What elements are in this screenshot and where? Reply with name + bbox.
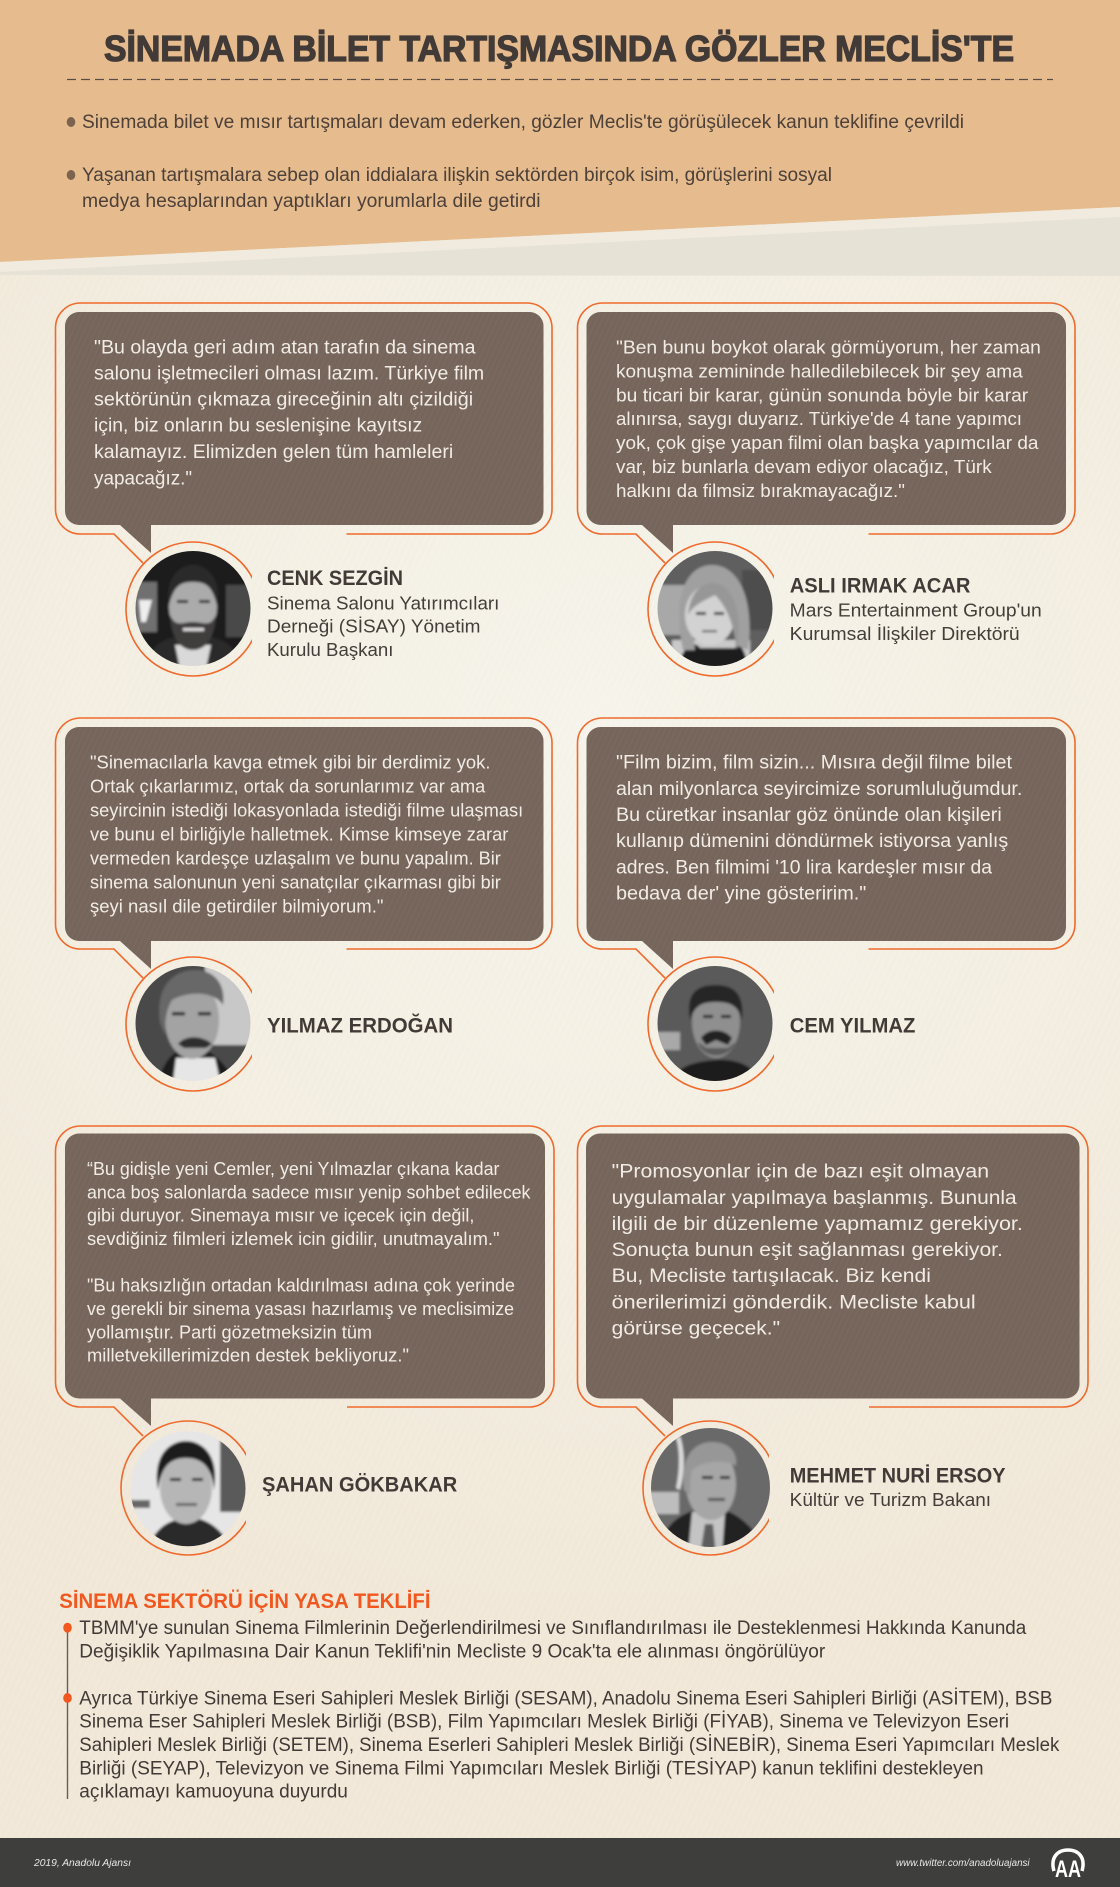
proposal text: açıklamayı kamuoyuna duyurdu	[79, 1782, 348, 1803]
bullet markers	[63, 1623, 72, 1703]
section heading: SİNEMA SEKTÖRÜ İÇİN YASA TEKLİFİ	[59, 1590, 431, 1613]
portrait ring	[648, 542, 782, 676]
quote text: seyircinin istediği lokasyonlada istediği filme ulaşması	[90, 800, 523, 821]
quote text: Sonuçta bunun eşit sağlanması gerekiyor.	[612, 1240, 1003, 1261]
photo: Şahan Gökbakar	[130, 1432, 246, 1546]
intro bullets: medya hesaplarından yaptıkları yorumlarla dile getirdi	[82, 191, 541, 212]
proposal text: Birliği (SEYAP), Televizyon ve Sinema Filmi Yapımcıları Meslek Birliği (TESİYAP) kanun teklifini destekleyen	[79, 1758, 984, 1779]
photo: Cenk Sezgin	[136, 551, 250, 666]
name: ŞAHAN GÖKBAKAR	[262, 1474, 457, 1497]
quote text: salonu işletmecileri olması lazım. Türkiye film	[94, 363, 484, 384]
quote text: “Bu gidişle yeni Cemler, yeni Yılmazlar çıkana kadar	[87, 1159, 500, 1179]
quote text: Bu cüretkar insanlar göz önünde olan kişileri	[616, 805, 1002, 826]
credit: 2019, Anadolu Ajansı	[33, 1858, 131, 1869]
intro bullets	[67, 112, 964, 212]
quote text: Bu, Mecliste tartışılacak. Biz kendi	[612, 1266, 931, 1287]
quote text: şeyi nasıl dile getirdiler bilmiyorum."	[90, 896, 383, 917]
quote text: milletvekillerimizden destek bekliyoruz."	[87, 1346, 409, 1366]
portrait ring	[648, 957, 782, 1091]
quote text	[87, 1159, 531, 1366]
role: Kurumsal İlişkiler Direktörü	[790, 623, 1020, 644]
header band	[0, 0, 1120, 276]
quote text: bu ticari bir karar, günün sonunda böyle bir karar	[616, 386, 1028, 406]
role: Derneği (SİSAY) Yönetim	[267, 616, 480, 637]
panel: Yılmaz Erdoğan	[56, 718, 552, 1091]
quote text: yok, çok gişe yapan filmi olan başka yapımcılar da	[616, 433, 1040, 453]
quote text: sinema salonunun yeni sanatçılar çıkarması gibi bir	[90, 872, 501, 893]
panel: Şahan Gökbakar	[56, 1126, 554, 1555]
role: Mars Entertainment Group'un	[790, 600, 1042, 621]
quote text: görürse geçecek."	[612, 1318, 780, 1339]
icon: Anadolu Agency logo: AA	[1055, 1856, 1081, 1883]
portrait ring	[121, 1421, 255, 1555]
quote text: ve gerekli bir sinema yasası hazırlamış ve meclisimize	[87, 1299, 514, 1319]
quote text: halkını da filmsiz bırakmayacağız."	[616, 481, 905, 501]
role: Kültür ve Turizm Bakanı	[790, 1489, 991, 1510]
quote text: önerilerimizi gönderdik. Mecliste kabul	[612, 1292, 976, 1313]
role: Sinema Salonu Yatırımcıları	[267, 592, 499, 613]
proposal text	[79, 1618, 1060, 1803]
quote text: için, biz onların bu seslenişine kayıtsız	[94, 416, 422, 437]
quote text	[612, 1162, 1023, 1339]
quote text: yapacağız."	[94, 468, 192, 489]
name: MEHMET NURİ ERSOY	[790, 1464, 1006, 1487]
quote text: "Film bizim, film sizin... Mısıra değil filme bilet	[616, 752, 1013, 773]
quote text: adres. Ben filmimi '10 lira kardeşler mısır da	[616, 857, 992, 878]
quote text: "Bu olayda geri adım atan tarafın da sinema	[94, 337, 476, 358]
quote text: alınırsa, saygı duyarız. Türkiye'de 4 tane yapımcı	[616, 409, 1022, 429]
quote text	[616, 752, 1022, 904]
proposal text: Değişiklik Yapılmasına Dair Kanun Teklifi'nin Mecliste 9 Ocak'ta ele alınması öngörülüyor	[79, 1642, 826, 1663]
quote text: ve bunu el birliğiyle halletmek. Kimse kimseye zarar	[90, 824, 508, 845]
quote text: kalamayız. Elimizden gelen tüm hamleleri	[94, 442, 453, 463]
quote text: "Ben bunu boykot olarak görmüyorum, her zaman	[616, 338, 1041, 358]
icon: Anadolu Agency logo	[1053, 1850, 1083, 1883]
name: CENK SEZGİN	[267, 567, 403, 590]
panel: Aslı Irmak Acar	[578, 303, 1075, 676]
role	[790, 600, 1042, 644]
quote text: alan milyonlarca seyircimize sorumluluğumdur.	[616, 779, 1022, 800]
quote text: sektörünün çıkmaza gireceğinin altı çizildiği	[94, 390, 473, 411]
portrait ring	[643, 1421, 777, 1555]
proposal text: Sinema Eser Sahipleri Meslek Birliği (BSB), Film Yapımcıları Meslek Birliği (FİYAB), Sinema ve Televizyon Eseri	[79, 1712, 1009, 1733]
quote text: "Sinemacılarla kavga etmek gibi bir derdimiz yok.	[90, 751, 490, 772]
title: SİNEMADA BİLET TARTIŞMASINDA GÖZLER MECLİS'TE	[104, 28, 1014, 69]
intro bullets: Yaşanan tartışmalara sebep olan iddialara ilişkin sektörden birçok isim, görüşlerini sosyal	[82, 165, 832, 186]
name: YILMAZ ERDOĞAN	[267, 1013, 453, 1037]
twitter address: www.twitter.com/anadoluajansi	[896, 1858, 1030, 1869]
quote text	[94, 337, 484, 489]
quote text: "Promosyonlar için de bazı eşit olmayan	[612, 1162, 989, 1183]
quote text: ilgili de bir düzenleme yapmamız gerekiyor.	[612, 1214, 1023, 1235]
photo: Aslı Irmak Acar	[658, 551, 772, 666]
intro bullets: Sinemada bilet ve mısır tartışmaları devam ederken, gözler Meclis'te görüşülecek kanun teklifine çevrildi	[82, 112, 964, 133]
photo: Cem Yılmaz	[658, 966, 772, 1081]
quote text: "Bu haksızlığın ortadan kaldırılması adına çok yerinde	[87, 1276, 515, 1296]
panel: Cenk Sezgin	[56, 303, 552, 676]
panel: Cem Yılmaz	[578, 718, 1075, 1091]
name: ASLI IRMAK ACAR	[790, 575, 970, 598]
quote text: kullanıp dümenini döndürmek istiyorsa yanlış	[616, 831, 1008, 852]
quote text: bedava der' yine gösteririm."	[616, 883, 866, 904]
proposal text: Ayrıca Türkiye Sinema Eseri Sahipleri Meslek Birliği (SESAM), Anadolu Sinema Eseri Sahipleri Birliği (ASİTEM), BSB	[79, 1688, 1052, 1709]
proposal text: TBMM'ye sunulan Sinema Filmlerinin Değerlendirilmesi ve Sınıflandırılması ile Desteklenmesi Hakkında Kanunda	[79, 1618, 1027, 1639]
name: CEM YILMAZ	[790, 1014, 916, 1037]
role	[267, 592, 499, 660]
role: Kurulu Başkanı	[267, 639, 393, 660]
quote text: yollamıştır. Parti gözetmeksizin tüm	[87, 1322, 372, 1342]
footer	[0, 1838, 1120, 1887]
photo: Yılmaz Erdoğan	[136, 966, 250, 1081]
quote text: vermeden kardeşçe uzlaşalım ve bunu yapalım. Bir	[90, 848, 501, 869]
quote text: sevdiğiniz filmleri izlemek icin gidilir, unutmayalım."	[87, 1229, 500, 1249]
section: law proposal	[59, 1590, 1060, 1803]
portrait ring	[126, 542, 260, 676]
quote text: Ortak çıkarlarımız, ortak da sorunlarımız var ama	[90, 775, 486, 796]
quote text: konuşma zemininde halledilebilecek bir şey ama	[616, 362, 1024, 382]
quote text	[616, 338, 1041, 501]
quote text: anca boş salonlarda sadece mısır yenip sohbet edilecek	[87, 1182, 531, 1202]
photo: Mehmet Nuri Ersoy	[651, 1428, 770, 1547]
panel: Mehmet Nuri Ersoy	[578, 1126, 1088, 1555]
proposal text: Sahipleri Meslek Birliği (SETEM), Sinema Eserleri Sahipleri Meslek Birliği (SİNEBİR), Sinema Eseri Yapımcıları Meslek	[79, 1735, 1060, 1756]
quote text: uygulamalar yapılmaya başlanmış. Bununla	[612, 1188, 1017, 1209]
portrait ring	[126, 957, 260, 1091]
quote text	[90, 751, 523, 917]
quote text: var, biz bunlarla devam ediyor olacağız, Türk	[616, 457, 993, 477]
quote text: gibi duruyor. Sinemaya mısır ve içecek için değil,	[87, 1206, 474, 1226]
